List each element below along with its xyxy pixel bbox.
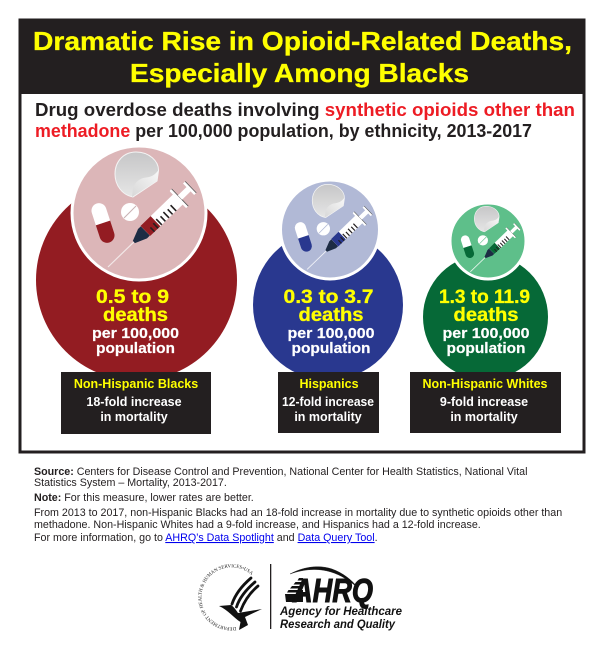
icon circle: red bbox=[72, 146, 206, 280]
logo divider bbox=[270, 564, 271, 629]
large red circle bbox=[36, 180, 237, 380]
rate text: per 100,000 bbox=[92, 326, 179, 342]
label box bbox=[61, 372, 211, 434]
label box: Non-Hispanic Blacks bbox=[74, 377, 198, 391]
source and notes text: Source: Centers for Disease Control and Prevention, National Center for Health Statistics, National Vital bbox=[34, 466, 527, 478]
source and notes text bbox=[34, 466, 562, 544]
label box: in mortality bbox=[450, 410, 518, 424]
rate text: deaths bbox=[103, 305, 168, 326]
logo: AHRQ bbox=[279, 567, 402, 631]
subtitle: methadone per 100,000 population, by ethnicity, 2013-2017 bbox=[35, 120, 532, 141]
rate text: population bbox=[96, 341, 175, 357]
large green circle bbox=[423, 254, 548, 380]
rate text bbox=[92, 287, 179, 357]
rate text: deaths bbox=[298, 305, 364, 326]
source and notes text: methadone. Non-Hispanic Whites had a 9-fold increase, and Hispanics had a 12-fold increase. bbox=[34, 519, 481, 531]
source and notes text: Note: For this measure, lower rates are better. bbox=[34, 492, 254, 504]
rate text: population bbox=[292, 341, 370, 357]
rate text bbox=[439, 287, 530, 357]
icon: patch, capsule, tablet and syringe in blue bbox=[293, 184, 374, 276]
subtitle: Drug overdose deaths involving synthetic opioids other than bbox=[35, 99, 575, 120]
source and notes text: From 2013 to 2017, non-Hispanic Blacks had an 18-fold increase in mortality due to synthetic opioids other than bbox=[34, 507, 562, 519]
label box: in mortality bbox=[294, 410, 362, 424]
large blue circle bbox=[253, 230, 403, 380]
source and notes text: For more information, go to AHRQ’s Data Spotlight and Data Query Tool. bbox=[34, 532, 378, 544]
panel: Hispanics bbox=[253, 180, 403, 433]
title banner bbox=[19, 19, 585, 94]
label box: Hispanics bbox=[299, 377, 359, 391]
icon: patch, capsule, tablet and syringe in green bbox=[460, 206, 522, 277]
label box: 18-fold increase bbox=[86, 395, 182, 409]
label box: in mortality bbox=[100, 410, 168, 424]
rate text: per 100,000 bbox=[288, 326, 374, 342]
logo: HHS seal: DEPARTMENT OF HEALTH & HUMAN SERVICES•USA bbox=[198, 564, 252, 631]
rate text: population bbox=[446, 341, 526, 357]
label box bbox=[278, 372, 379, 433]
rate text bbox=[284, 287, 374, 357]
subtitle bbox=[35, 99, 575, 141]
rate text: per 100,000 bbox=[442, 326, 530, 342]
panel: Non-Hispanic Whites bbox=[410, 203, 561, 433]
panel: Non-Hispanic Blacks bbox=[36, 146, 237, 434]
logo: AHRQ: AHRQ bbox=[292, 572, 373, 609]
rate text: 0.3 to 3.7 bbox=[284, 287, 374, 308]
icon circle: green bbox=[450, 203, 526, 279]
label box bbox=[410, 372, 561, 433]
rate text: 0.5 to 9 bbox=[96, 287, 169, 308]
label box: Non-Hispanic Whites bbox=[422, 377, 548, 391]
logo: AHRQ: Research and Quality bbox=[280, 617, 396, 631]
label box: 9-fold increase bbox=[440, 395, 528, 409]
infographic frame bbox=[20, 20, 584, 452]
label box: 12-fold increase bbox=[282, 395, 374, 409]
icon circle: blue bbox=[280, 180, 380, 279]
rate text: deaths bbox=[454, 305, 518, 326]
title banner: Dramatic Rise in Opioid-Related Deaths, bbox=[33, 26, 572, 56]
icon: patch, capsule, tablet and syringe in red bbox=[90, 152, 199, 276]
source and notes text: Statistics System – Mortality, 2013-2017. bbox=[34, 477, 227, 489]
logo: AHRQ: Agency for Healthcare bbox=[279, 604, 402, 618]
title banner: Especially Among Blacks bbox=[130, 58, 469, 88]
rate text: 1.3 to 11.9 bbox=[439, 287, 530, 308]
